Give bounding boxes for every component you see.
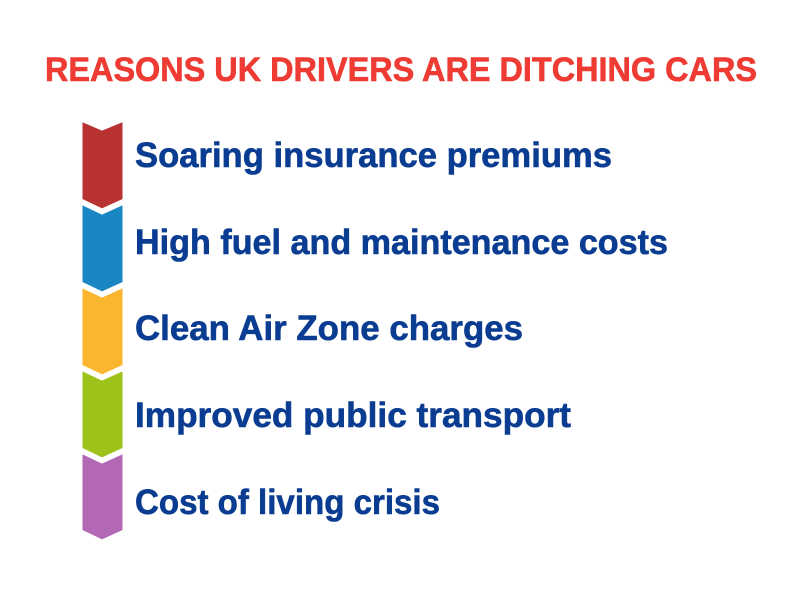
reason 3: Clean Air Zone charges [135,309,523,348]
title: REASONS UK DRIVERS ARE DITCHING CARS [45,51,757,89]
reason 2: High fuel and maintenance costs [135,223,668,262]
chevron arrow [81,120,124,541]
reason 5: Cost of living crisis [135,483,440,522]
chevron: blue [81,203,124,293]
reason 1: Soaring insurance premiums [135,136,612,175]
chevron: green [81,369,124,459]
chevron: yellow [81,286,124,376]
reason 4: Improved public transport [135,396,571,435]
chevron: red [81,120,124,210]
chevron: purple [81,452,124,541]
